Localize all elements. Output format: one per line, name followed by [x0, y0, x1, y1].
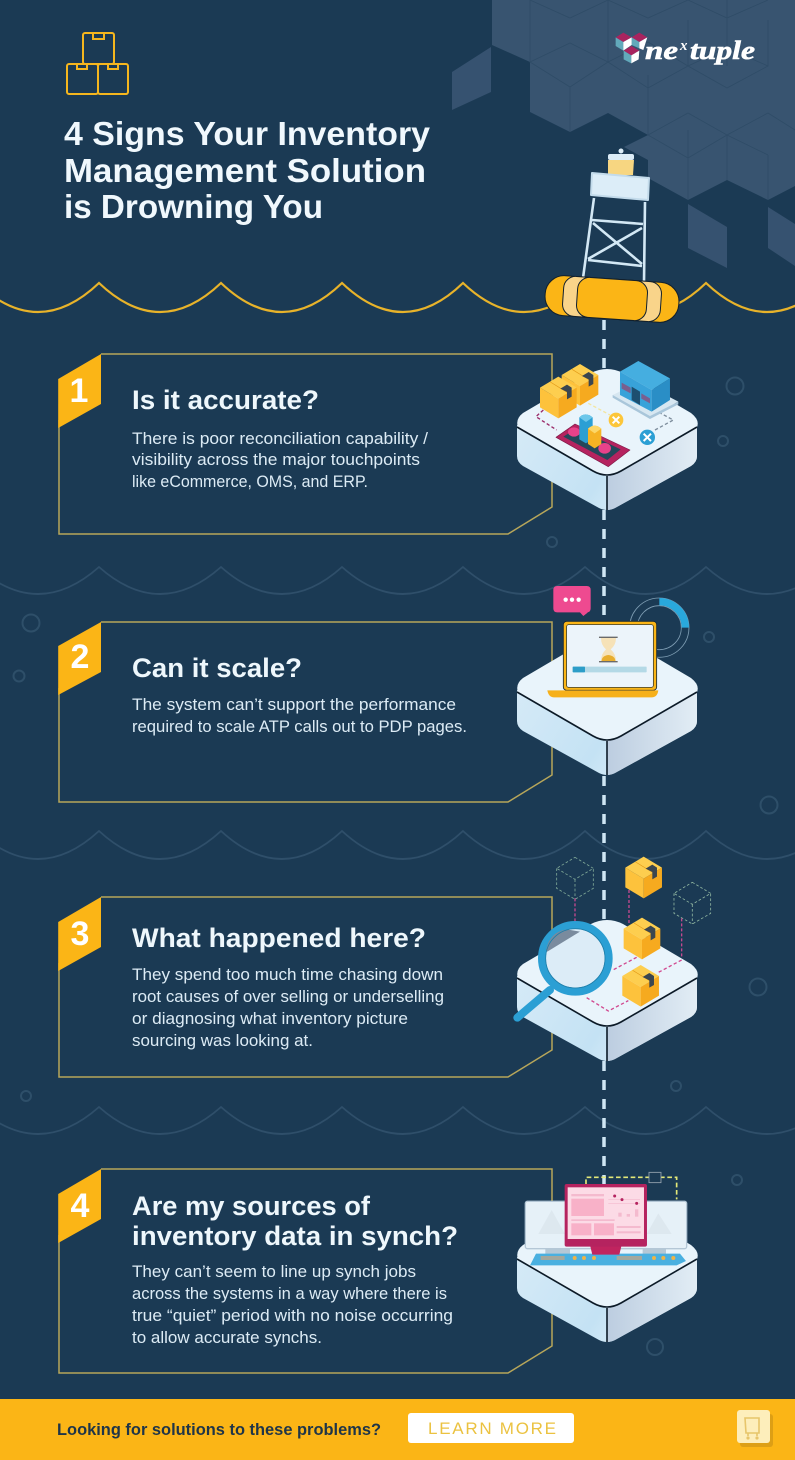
icon: cart tile	[737, 1410, 773, 1447]
panel: card 4	[58, 1169, 552, 1373]
wave: underwater 3	[0, 1107, 795, 1134]
icon: stacked boxes	[67, 33, 128, 94]
heading 2: Can it scale?	[132, 653, 302, 683]
body text 3: sourcing was looking at.	[132, 1032, 313, 1050]
body text 3: root causes of over selling or underselling	[132, 988, 444, 1006]
body text 2	[132, 696, 467, 736]
illustration: accuracy platform	[517, 361, 698, 510]
panel: card 3	[58, 897, 552, 1077]
bubbles	[14, 378, 778, 1355]
title: Management Solution	[64, 152, 426, 189]
body text 4: to allow accurate synchs.	[132, 1329, 322, 1347]
logo: nextuple: x	[679, 38, 688, 54]
wave: underwater 2	[0, 831, 795, 859]
body text 3: They spend too much time chasing down	[132, 966, 443, 984]
badge 1: 1	[70, 372, 88, 410]
panel: card 2	[58, 622, 552, 802]
title: 4 Signs Your Inventory	[64, 115, 431, 152]
heading 3: What happened here?	[132, 923, 426, 953]
body text 1: visibility across the major touchpoints	[132, 451, 420, 469]
title	[64, 115, 431, 225]
button: learn more: LEARN MORE	[428, 1419, 556, 1438]
body text 4: across the systems in a way where there is	[132, 1285, 447, 1303]
body text 2: required to scale ATP calls out to PDP pages.	[132, 718, 467, 736]
badge 3	[58, 897, 101, 971]
button: learn more	[408, 1413, 574, 1443]
badge 2	[58, 622, 101, 695]
heading 4	[132, 1191, 458, 1251]
badge 3: 3	[71, 915, 89, 953]
footer banner	[0, 1399, 795, 1460]
badge 2: 2	[71, 638, 89, 676]
badge 4	[58, 1169, 101, 1243]
footer prompt text: Looking for solutions to these problems?	[57, 1421, 381, 1439]
hexagonal cube pattern	[452, 0, 795, 268]
wave: underwater 1	[0, 567, 795, 594]
body text 4	[132, 1263, 453, 1347]
illustration: root cause platform	[517, 857, 711, 1061]
wave: yellow water line	[0, 283, 795, 312]
title: is Drowning You	[64, 188, 323, 225]
body text 1: There is poor reconciliation capability /	[132, 430, 428, 448]
buoy	[544, 148, 680, 324]
body text 3: or diagnosing what inventory picture	[132, 1010, 408, 1028]
logo: nextuple: ne	[645, 36, 678, 65]
heading 4: inventory data in synch?	[132, 1221, 458, 1251]
body text 1: like eCommerce, OMS, and ERP.	[132, 473, 368, 491]
badge 1	[58, 354, 101, 428]
body text 2: The system can’t support the performance	[132, 696, 456, 714]
anchor chain dashed line	[602, 320, 606, 1190]
heading 4: Are my sources of	[132, 1191, 371, 1221]
body text 4: true “quiet” period with no noise occurring	[132, 1307, 453, 1325]
panel: card 1	[58, 354, 552, 534]
body text 4: They can’t seem to line up synch jobs	[132, 1263, 416, 1281]
illustration: data sync platform	[517, 1172, 698, 1342]
body text 3	[132, 966, 444, 1050]
badge 4: 4	[71, 1187, 90, 1225]
body text 1	[132, 430, 428, 491]
logo: nextuple	[616, 33, 755, 65]
heading 1: Is it accurate?	[132, 385, 319, 415]
illustration: scale platform	[517, 586, 698, 775]
logo: nextuple: tuple	[690, 36, 755, 65]
